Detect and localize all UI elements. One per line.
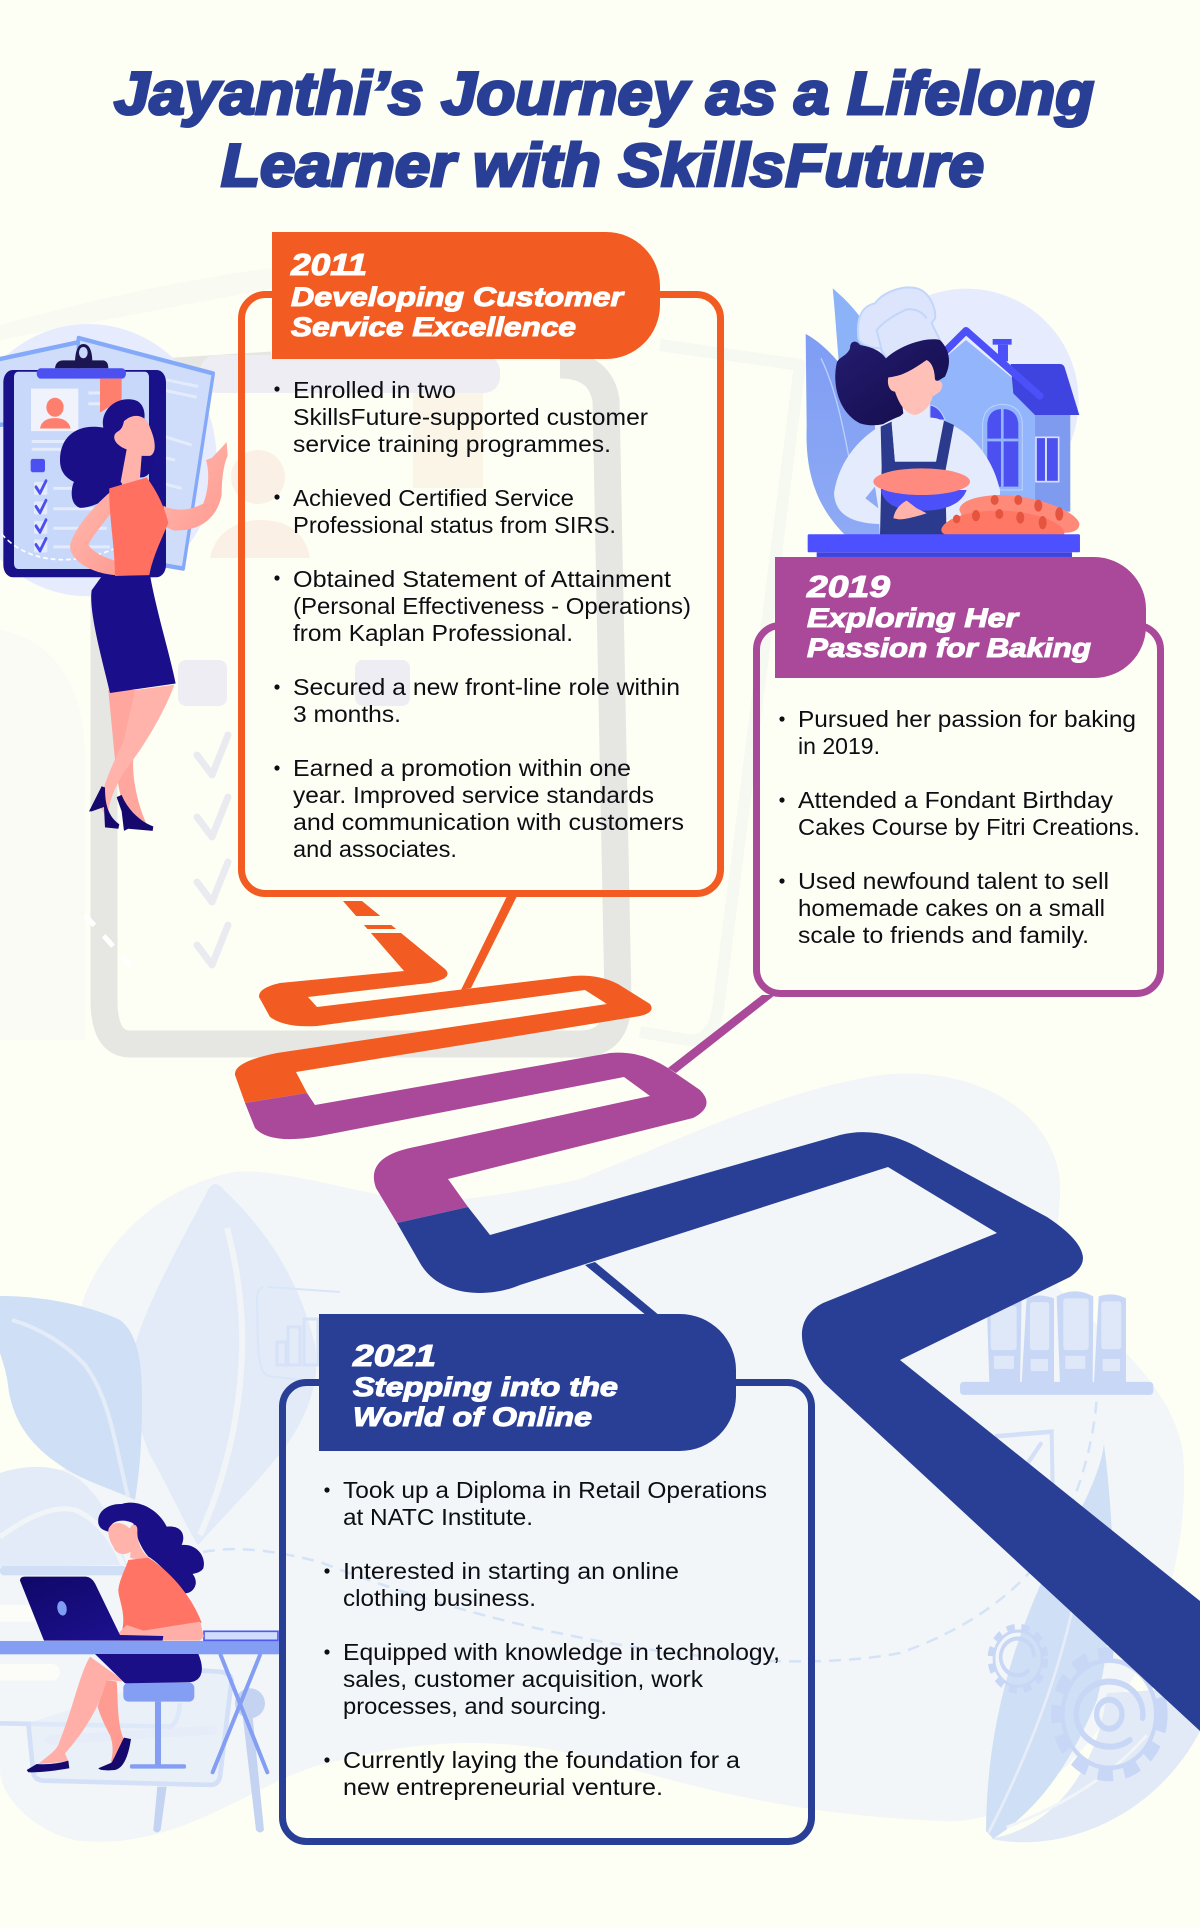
- panel: 2011: [242, 232, 720, 990]
- panel: 2019: [668, 557, 1160, 1073]
- hair: [98, 1503, 204, 1593]
- background: lower blue blob: [0, 1073, 1184, 1842]
- clipboard: [3, 370, 166, 577]
- background: books, gears and leaves on the right: [960, 1291, 1200, 1842]
- road: white dashes: [353, 916, 403, 933]
- heels: [89, 786, 119, 829]
- text block: 2011 bullets: and associates.: [293, 836, 457, 862]
- back leg: [98, 1680, 124, 1765]
- text block: 2021 bullets: Equipped with knowledge in technology,: [343, 1639, 780, 1665]
- connector: 2011 panel to road: [461, 894, 518, 990]
- hair: [60, 399, 153, 508]
- text block: 2011 bullets: service training programmes.: [293, 431, 611, 457]
- text block: 2011 bullets: Achieved Certified Service: [293, 485, 574, 511]
- front leg: [38, 1657, 125, 1764]
- panel header: 2021: Stepping into the: [353, 1372, 618, 1402]
- circle behind clipboard: [0, 324, 217, 596]
- text block: 2021 bullets: Interested in starting an online: [343, 1558, 679, 1584]
- panel header: 2021: World of Online: [353, 1402, 592, 1432]
- back papers: [57, 338, 213, 569]
- text block: 2019 bullets: in 2019.: [798, 733, 880, 759]
- panel header: 2021: 2021: [352, 1338, 436, 1373]
- text block: 2021 bullets: at NATC Institute.: [343, 1504, 533, 1530]
- text block: 2011 bullets: 3 months.: [293, 701, 401, 727]
- chair watermark: [0, 1566, 265, 1832]
- checklist: [31, 459, 45, 472]
- face: [108, 1523, 148, 1559]
- legs: [108, 690, 147, 825]
- forearm: [118, 1622, 204, 1641]
- chef face: [888, 360, 942, 415]
- road: blue segment: [397, 1132, 1200, 1731]
- panel header: 2011: Service Excellence: [291, 312, 576, 342]
- laptop: [20, 1577, 163, 1641]
- text block: 2019 bullets: Used newfound talent to sell: [798, 868, 1109, 894]
- counter: [808, 534, 1080, 552]
- text block: 2011 bullets: [274, 377, 691, 862]
- text block: 2011 bullets: Obtained Statement of Attainment: [293, 566, 672, 592]
- road: orange segment: [235, 901, 652, 1103]
- title: [114, 60, 1094, 199]
- text block: 2011 bullets: and communication with customers: [293, 809, 684, 835]
- background: clipboard watermark: [0, 268, 800, 1044]
- arms: [70, 488, 127, 575]
- panel outline: 2019: [756, 626, 1160, 994]
- torso: [118, 1558, 202, 1637]
- text block: 2011 bullets: Earned a promotion within one: [293, 755, 631, 781]
- text block: 2019 bullets: Pursued her passion for baking: [798, 706, 1136, 732]
- text block: 2019 bullets: [779, 706, 1140, 948]
- text block: 2011 bullets: SkillsFuture-supported customer: [293, 404, 648, 430]
- panel header: 2011: Developing Customer: [291, 282, 625, 312]
- pie: [881, 490, 967, 511]
- text block: 2011 bullets: Enrolled in two: [293, 377, 456, 403]
- house: [930, 340, 1035, 513]
- panel outline: 2021: [282, 1382, 812, 1842]
- icon: chef with house and bread: [806, 287, 1080, 557]
- panel header: 2019: Exploring Her: [807, 603, 1020, 633]
- text block: 2019 bullets: scale to friends and family.: [798, 922, 1089, 948]
- road: purple segment: [245, 1053, 707, 1223]
- text block: 2021 bullets: Currently laying the foundation for a: [343, 1747, 740, 1773]
- face and neck: [114, 416, 155, 495]
- text block: 2011 bullets: Secured a new front-line role within: [293, 674, 680, 700]
- leaves: [833, 288, 875, 440]
- chef hair: [835, 339, 949, 425]
- text block: 2021 bullets: clothing business.: [343, 1585, 536, 1611]
- text block: 2019 bullets: homemade cakes on a small: [798, 895, 1105, 921]
- text block: 2011 bullets: Professional status from SIRS.: [293, 512, 616, 538]
- text block: 2011 bullets: from Kaplan Professional.: [293, 620, 573, 646]
- chef hat: [858, 287, 940, 358]
- journey road: [235, 901, 1200, 1731]
- desk: [0, 1641, 279, 1654]
- icon: woman at laptop: [0, 1503, 279, 1832]
- top: [109, 478, 168, 577]
- text block: 2021 bullets: new entrepreneurial venture.: [343, 1774, 663, 1800]
- chef body: [834, 415, 1000, 524]
- text block: 2021 bullets: processes, and sourcing.: [343, 1693, 607, 1719]
- background: dashed arc: [203, 1394, 1097, 1661]
- text block: 2021 bullets: Took up a Diploma in Retail Operations: [343, 1477, 767, 1503]
- text block: 2019 bullets: Attended a Fondant Birthday: [798, 787, 1114, 813]
- shoes: [27, 1761, 69, 1772]
- panel header: 2011: [272, 232, 660, 359]
- skirt: [95, 1654, 202, 1683]
- connector: 2021 panel to road: [585, 1262, 660, 1316]
- connector: 2019 panel to road: [668, 995, 775, 1073]
- panel header: 2019: [775, 557, 1146, 678]
- title: Learner with SkillsFuture: [221, 132, 984, 199]
- skirt: [91, 575, 176, 693]
- text block: 2011 bullets: year. Improved service standards: [293, 782, 654, 808]
- title: Jayanthi’s Journey as a Lifelong: [114, 60, 1094, 127]
- bread: [959, 495, 1079, 533]
- panel header: 2021: [319, 1314, 736, 1451]
- panel: 2021: [282, 1262, 812, 1842]
- text block: 2011 bullets: (Personal Effectiveness - Operations): [293, 593, 691, 619]
- text block: 2021 bullets: sales, customer acquisition, work: [343, 1666, 704, 1692]
- panel header: 2019: 2019: [806, 569, 891, 604]
- panel outline: 2011: [242, 294, 720, 894]
- background: left leaves: [0, 1184, 340, 1567]
- stool: [123, 1683, 194, 1702]
- text block: 2019 bullets: Cakes Course by Fitri Creations.: [798, 814, 1140, 840]
- panel header: 2019: Passion for Baking: [807, 633, 1092, 663]
- text block: 2021 bullets: [324, 1477, 780, 1800]
- circle behind chef: [874, 288, 1078, 442]
- apron: [880, 421, 954, 535]
- panel header: 2011: 2011: [290, 247, 367, 282]
- icon: woman with clipboard: [0, 324, 228, 831]
- book on desk: [204, 1631, 278, 1640]
